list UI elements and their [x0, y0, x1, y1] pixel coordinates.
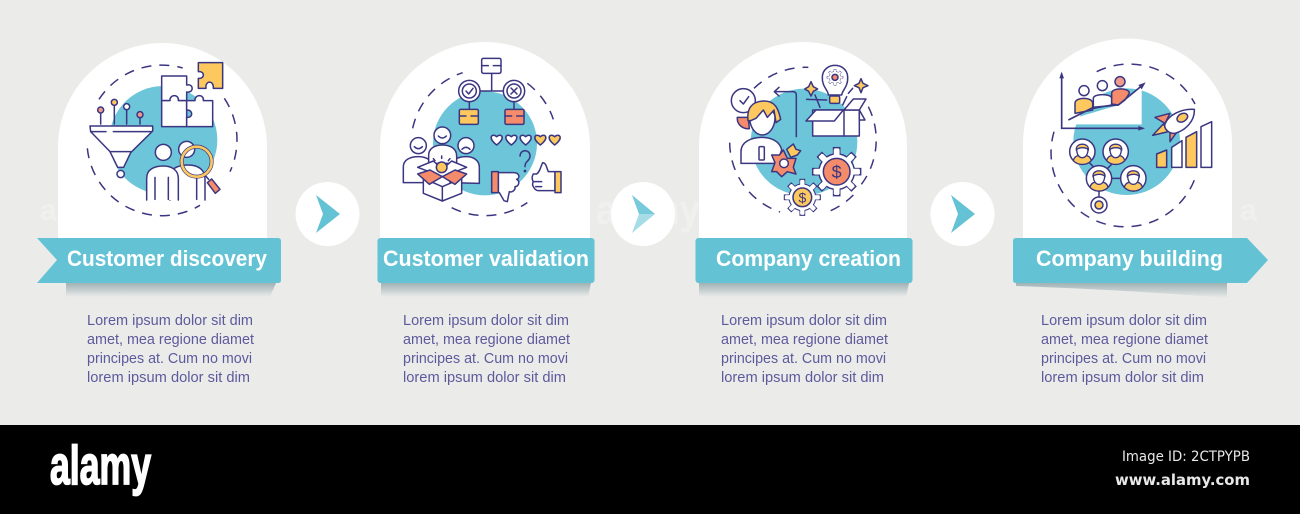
description 4: amet, mea regione diamet — [1041, 331, 1209, 348]
watermark fragment 2: alamy — [596, 186, 701, 233]
description 2 — [403, 312, 571, 386]
description 2: amet, mea regione diamet — [403, 331, 571, 348]
arch card 4 — [1023, 38, 1232, 245]
description 3: lorem ipsum dolor sit dim — [721, 369, 884, 386]
icon: company creation: $ — [832, 162, 842, 182]
description 1: lorem ipsum dolor sit dim — [87, 369, 250, 386]
arch card 2 — [380, 42, 590, 245]
description 1 — [87, 312, 255, 386]
icon: customer discovery — [87, 63, 237, 216]
heading 2: Customer validation — [383, 246, 589, 271]
banner 1 — [37, 238, 281, 283]
banner shadow 3 — [699, 283, 909, 297]
banner shadow 2 — [381, 283, 591, 297]
description 3: principes at. Cum no movi — [721, 350, 886, 367]
description 1: Lorem ipsum dolor sit dim — [87, 312, 253, 329]
banner shadow 1 — [66, 283, 276, 297]
heading 1: Customer discovery — [67, 246, 268, 271]
description 2: Lorem ipsum dolor sit dim — [403, 312, 569, 329]
arrow 1 — [296, 182, 360, 246]
description 4: Lorem ipsum dolor sit dim — [1041, 312, 1207, 329]
icon: customer validation — [403, 58, 561, 216]
icon: company building — [1051, 64, 1212, 227]
arrow 2 — [611, 182, 675, 246]
icon: company creation: $ — [798, 189, 806, 205]
watermark fragments 1: a — [40, 194, 57, 227]
description 3: amet, mea regione diamet — [721, 331, 889, 348]
description 3: Lorem ipsum dolor sit dim — [721, 312, 887, 329]
description 1: amet, mea regione diamet — [87, 331, 255, 348]
banner 2 — [378, 238, 594, 283]
description 4 — [1041, 312, 1209, 386]
description 3 — [721, 312, 889, 386]
panel: customer validation — [378, 42, 594, 386]
arch card 1 — [58, 43, 267, 245]
description 2: lorem ipsum dolor sit dim — [403, 369, 566, 386]
arrow 3 — [930, 182, 994, 246]
icon: company creation — [730, 65, 876, 215]
panel: company creation — [696, 42, 912, 386]
watermark fragment 4: a — [1240, 194, 1257, 227]
banner 3 — [696, 238, 912, 283]
description 1: principes at. Cum no movi — [87, 350, 252, 367]
footer logo: alamy — [50, 434, 151, 496]
image id: Image ID: 2CTPYPB — [1122, 449, 1250, 465]
description 4: lorem ipsum dolor sit dim — [1041, 369, 1204, 386]
panel: company building — [1013, 38, 1268, 386]
description 4: principes at. Cum no movi — [1041, 350, 1206, 367]
heading 4: Company building — [1036, 246, 1223, 271]
banner 4 — [1013, 238, 1268, 283]
heading 3: Company creation — [716, 246, 901, 271]
banner shadow 4 — [1016, 283, 1227, 298]
description 2: principes at. Cum no movi — [403, 350, 568, 367]
website: www.alamy.com — [1115, 471, 1250, 489]
arch card 3 — [699, 42, 907, 245]
footer bar — [0, 425, 1300, 514]
panel: customer discovery — [37, 43, 281, 386]
